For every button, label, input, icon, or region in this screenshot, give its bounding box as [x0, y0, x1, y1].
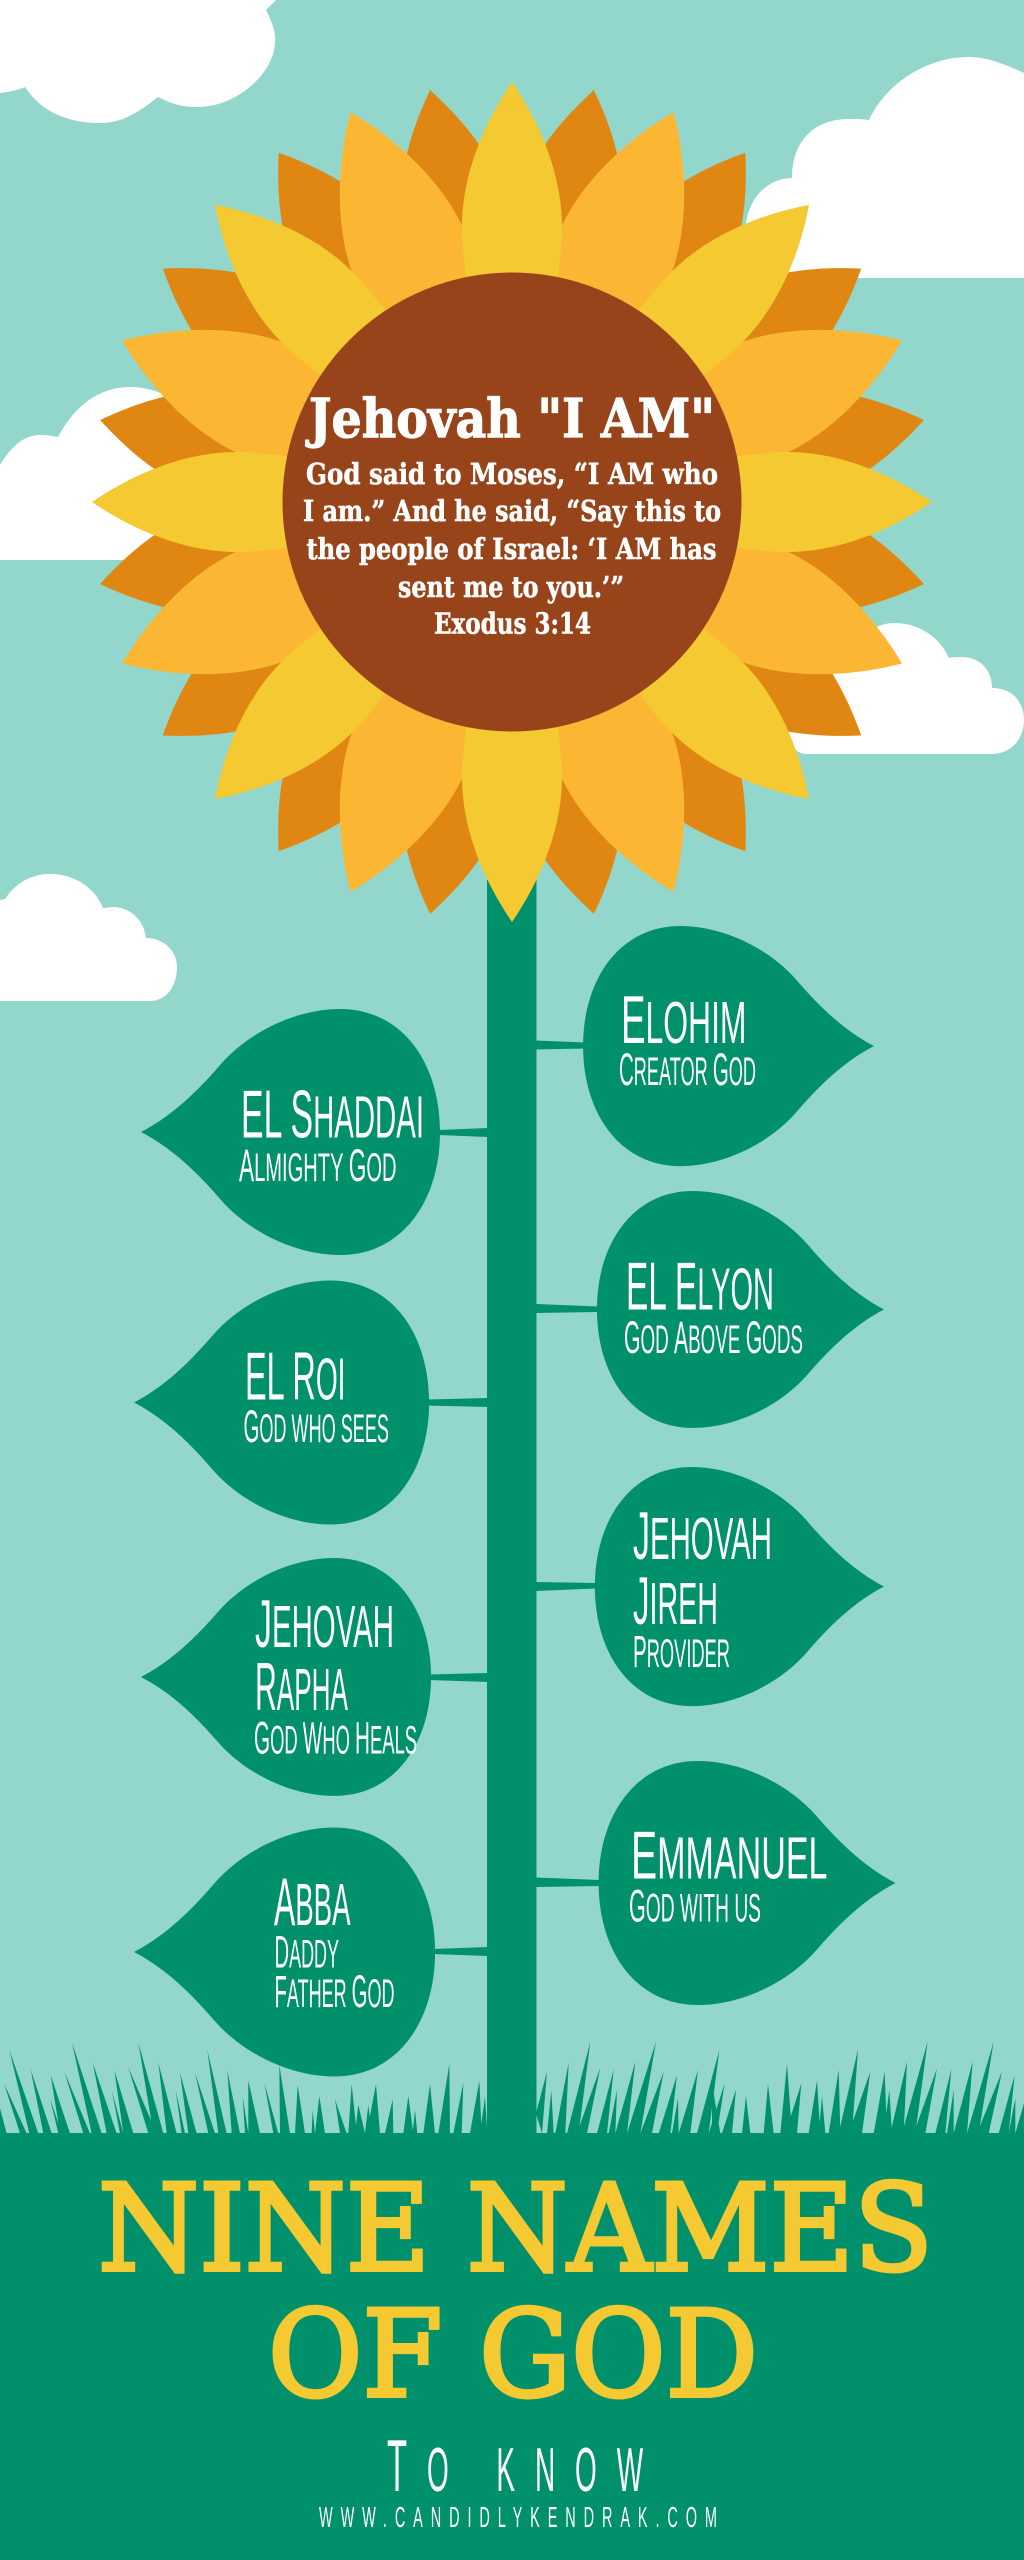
flower verse: God said to Moses, “I AM who — [306, 457, 718, 491]
leaf: Jehovah Jireh — [536, 1467, 884, 1706]
leaf: El Roi: GOD WHO SEES — [244, 1401, 389, 1452]
title: OF GOD — [268, 2286, 758, 2425]
cloud: lower left — [0, 874, 177, 1001]
cloud: middle right — [780, 623, 1024, 754]
grass blades — [0, 2042, 1024, 2133]
leaf: Emmanuel: EMMANUEL — [631, 1818, 828, 1894]
leaf: El Roi — [134, 1280, 488, 1525]
sunflower — [89, 79, 935, 925]
leaf: Jehovah Rapha — [141, 1558, 488, 1796]
title — [98, 2160, 933, 2425]
leaf: Jehovah Rapha: GOD WHO HEALS — [254, 1712, 417, 1764]
flower verse — [303, 457, 721, 640]
stem — [487, 880, 536, 2140]
middle orange petals — [99, 89, 925, 915]
leaf: Abba — [134, 1828, 488, 2076]
flower verse: Exodus 3:14 — [434, 606, 591, 640]
flower verse: I am.” And he said, “Say this to — [303, 494, 721, 528]
flower verse: the people of Israel: ‘I AM has — [306, 532, 716, 566]
leaf: Elohim: ELOHIM — [621, 982, 746, 1058]
flower verse: sent me to you.’” — [398, 570, 624, 604]
leaf: Abba: ABBA — [274, 1864, 351, 1940]
leaf: Jehovah Rapha: RAPHA — [255, 1649, 348, 1725]
leaf: El Elyon — [536, 1191, 884, 1428]
leaf: Jehovah Jireh: JIREH — [633, 1563, 718, 1639]
outer dark orange petals — [89, 79, 935, 925]
leaf: Elohim — [536, 926, 874, 1166]
leaf: El Elyon: EL ELYON — [626, 1248, 774, 1324]
leaf: Emmanuel — [536, 1761, 896, 2005]
inner yellow petals — [92, 82, 932, 922]
leaf: El Elyon: GOD ABOVE GODS — [624, 1312, 803, 1363]
flower heading: Jehovah "I AM" — [305, 388, 715, 450]
leaf: Emmanuel: GOD WITH US — [629, 1880, 761, 1932]
website: WWW.CANDIDLYKENDRAK.COM — [319, 2500, 717, 2533]
leaf: Jehovah Jireh: PROVIDER — [633, 1626, 730, 1677]
leaf: El Shaddai — [141, 1009, 488, 1255]
leaf: Jehovah Jireh: JEHOVAH — [633, 1498, 772, 1574]
leaf: El Roi: EL ROI — [245, 1338, 346, 1414]
leaf: El Shaddai: EL SHADDAI — [241, 1076, 424, 1152]
subtitle: T O KNOW — [387, 2425, 643, 2506]
leaf: El Shaddai: ALMIGHTY GOD — [239, 1140, 396, 1191]
flower centre disc — [282, 272, 742, 732]
title: NINE NAMES — [98, 2160, 933, 2299]
leaf: Jehovah Rapha: JEHOVAH — [255, 1586, 394, 1662]
leaf: Elohim: CREATOR GOD — [619, 1044, 756, 1095]
cloud: middle left — [0, 387, 240, 560]
ground — [0, 2133, 1024, 2560]
leaf: Abba: FATHER GOD — [274, 1966, 395, 2017]
leaf: Abba: DADDY — [274, 1926, 339, 1978]
cloud: top right — [744, 57, 1024, 278]
cloud: top left — [0, 0, 276, 123]
